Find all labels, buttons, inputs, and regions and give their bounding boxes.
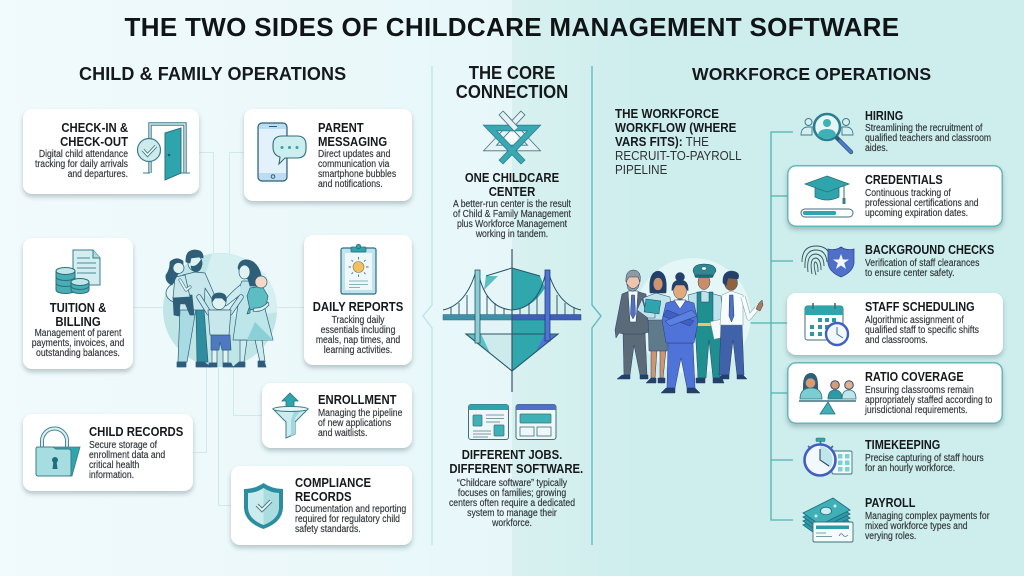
description: tracking for daily arrivals [35,159,128,170]
boy [199,293,241,367]
description: Precise capturing of staff hours [865,453,984,464]
description: outstanding balances. [36,348,120,359]
description: Secure storage of [89,440,157,451]
description: Direct updates and [318,149,390,160]
icon: stopwatch and timesheet [802,437,854,477]
item: background checks [802,242,994,279]
heading: workforce operations: WORKFORCE OPERATIONS [692,64,931,84]
card: ratio coverage [787,362,1003,424]
card: daily reports [304,235,412,365]
description: of new applications [318,418,391,429]
description: Tracking daily [332,315,384,326]
block: different jobs different software [449,447,583,529]
description: Managing the pipeline [318,408,402,419]
description: plus Workforce Management [457,219,567,230]
description: Documentation and reporting [295,504,406,515]
description [865,454,984,474]
description: aides. [865,143,888,154]
heading: RATIO COVERAGE [865,369,964,384]
description: and notifications. [318,179,383,190]
icon: folder with lock [36,426,80,476]
description: smartphone bubbles [318,169,396,180]
heading: DIFFERENT SOFTWARE. [449,461,583,476]
heading: ENROLLMENT [318,392,397,407]
description: Management of parent [35,328,121,339]
illustration: family [163,250,277,368]
heading: ONE CHILDCARE [465,170,559,185]
heading: the core connection: THE CORE [469,63,555,83]
heading: child and family operations: CHILD & FAMILY OPERATIONS [79,64,346,84]
heading [318,120,387,149]
text: workforce workflow [615,107,742,177]
description [865,386,992,416]
illustration: workforce team [614,258,764,394]
description: verying roles. [865,531,916,542]
heading: the core connection [456,63,568,102]
description [449,478,575,529]
description [865,188,979,219]
woman with folder [637,271,672,383]
icon: calendar with clock [804,303,850,346]
description: and waitlists. [318,428,367,439]
description: workforce. [492,518,532,529]
card: parent messaging [244,109,412,201]
icon: interwoven star [482,110,542,164]
heading [449,447,583,476]
text: workforce workflow: RECRUIT-TO-PAYROLL [615,149,742,163]
description: and departures. [68,169,128,180]
description: qualified staff to specific shifts [865,325,979,336]
card: tuition and billing [23,238,133,369]
description: critical health [89,460,139,471]
heading: the core connection: CONNECTION [456,82,568,102]
man in green overalls [688,264,728,383]
mother [223,260,273,367]
man in grey suit [615,270,649,379]
icon: coins and invoice [56,250,100,294]
description: Verification of staff clearances [865,258,979,269]
description [318,149,396,190]
description: Streamlining the recruitment of [865,123,982,134]
description: payments, invoices, and [32,338,124,349]
heading [50,300,106,329]
heading: HIRING [865,108,903,123]
heading: CHECK-OUT [60,134,128,149]
heading: TIMEKEEPING [865,437,940,452]
heading [465,170,559,199]
description: Managing complex payments for [865,511,990,522]
description: qualified teachers and classroom [865,133,991,144]
card: enrollment [262,383,412,448]
icon: door with check [136,122,190,181]
heading: TUITION & [50,300,106,315]
description: centers often require a dedicated [449,498,575,509]
description: mixed workforce types and [865,521,968,532]
icon: magnifier over people [800,112,854,154]
description: learning activities. [324,345,392,356]
heading: CHILD RECORDS [89,424,183,439]
heading: PARENT [318,120,364,135]
card: child records [23,414,193,491]
description [865,512,990,542]
heading: BACKGROUND CHECKS [865,242,994,257]
description: appropriately staffed according to [865,395,992,406]
heading [295,475,371,504]
description: enrollment data and [89,450,165,461]
text: workforce workflow: THE WORKFORCE [615,107,719,121]
heading: BILLING [55,314,101,329]
card: credentials [787,165,1003,227]
icon: balance with teacher and children [798,372,858,417]
card: staff scheduling [787,293,1003,355]
description: for an hourly workforce. [865,463,955,474]
woman in blue suit [661,272,700,393]
description: jurisdictional requirements. [865,405,968,416]
icon: funnel with arrow [272,392,310,439]
man in white shirt [718,271,763,379]
heading: DIFFERENT JOBS. [462,447,562,462]
heading: STAFF SCHEDULING [865,299,975,314]
icon: graduation cap with progress bar [800,176,854,218]
text: workforce workflow: VARS FITS): THE [615,135,709,149]
description: communication via [318,159,389,170]
block: one childcare center [453,170,571,240]
description [865,123,991,154]
girl [166,259,194,316]
description [453,199,571,240]
heading: DAILY REPORTS [313,299,403,314]
description: Algorithmic assignment of [865,315,964,326]
description [295,504,406,535]
description [865,258,980,279]
icon: clipboard with sun [340,244,377,295]
description: A better-run center is the result [453,199,571,210]
heading: PAYROLL [865,495,915,510]
description: professional certifications and [865,198,979,209]
description: Digital child attendance [39,149,128,160]
icon: money stack and paycheck [802,496,854,544]
description [318,408,402,439]
text: workforce workflow: WORKFLOW (WHERE [615,121,736,135]
heading: COMPLIANCE [295,475,371,490]
description: to ensure center safety. [865,268,954,279]
item: payroll [793,494,1003,544]
description [865,316,979,346]
description: meals, nap times, and [316,335,400,346]
description: system to manage their [467,508,557,519]
description: Continuous tracking of [865,188,951,199]
description [32,328,124,359]
heading: MESSAGING [318,134,387,149]
icon: two software windows [468,404,556,440]
description: working in tandem. [476,229,548,240]
icon: fingerprint and badge [802,246,854,278]
icon: shield with check [244,483,283,529]
description: Ensuring classrooms remain [865,385,974,396]
item: timekeeping [793,436,1003,478]
icon: smartphone with bubble [257,122,307,182]
description [89,440,165,481]
father [166,250,215,367]
description [35,149,128,180]
heading: CHECK-IN & [61,120,128,135]
heading: CENTER [489,184,535,199]
description: focuses on families; growing [458,488,566,499]
description [316,315,400,356]
item: hiring [800,108,991,154]
heading [60,120,128,149]
description: upcoming expiration dates. [865,208,968,219]
card: compliance records [231,466,412,545]
illustration: bridge and shield [442,249,582,392]
heading: CREDENTIALS [865,172,943,187]
description: information. [89,470,134,481]
heading: RECORDS [295,489,352,504]
description: of Child & Family Management [453,209,571,220]
card: check-in and check-out [23,109,199,194]
title: THE TWO SIDES OF CHILDCARE MANAGEMENT SOFTWARE [125,12,899,42]
text: workforce workflow: PIPELINE [615,163,667,177]
description: “Childcare software” typically [457,478,567,489]
description: essentials including [321,325,395,336]
description: safety standards. [295,524,361,535]
description: required for regulatory child [295,514,400,525]
description: and classrooms. [865,335,928,346]
